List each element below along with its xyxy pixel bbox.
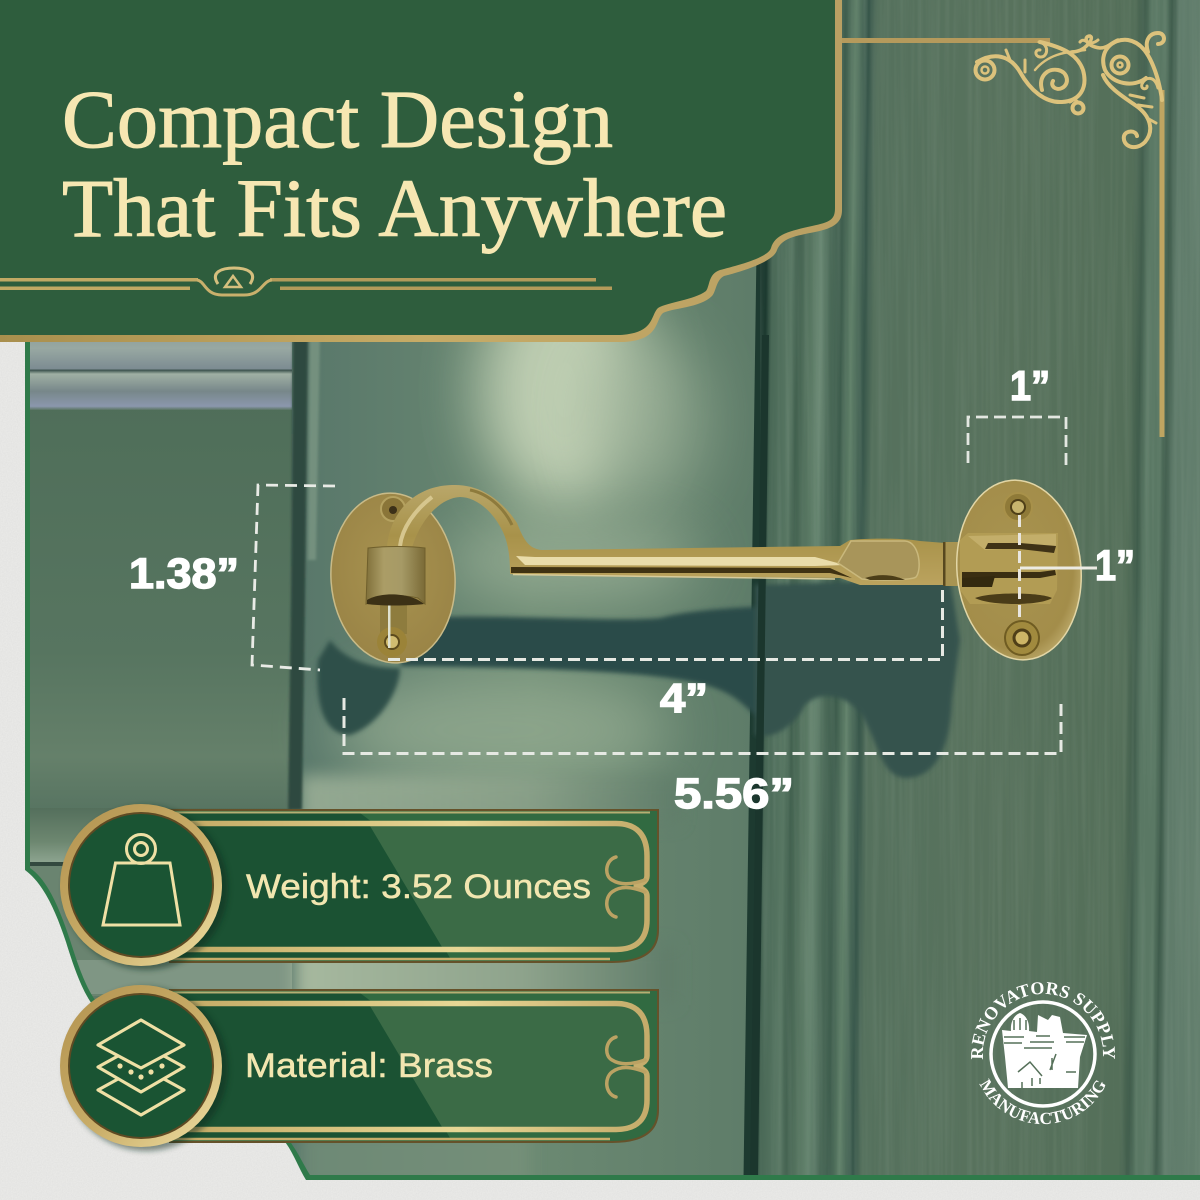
eye top screw — [1004, 493, 1032, 521]
weight badge medallion — [60, 804, 228, 970]
top molding of left panel — [30, 342, 292, 410]
material badge scroll — [607, 1037, 645, 1097]
left mounting plate — [325, 489, 461, 667]
dimension: 1 inch side: 1” — [1095, 542, 1135, 590]
banner gold border — [0, 0, 842, 342]
hook barrel sleeve — [366, 546, 425, 606]
dimension: 4 inch: 4” — [660, 675, 708, 721]
right door with vertical beading — [743, 0, 1200, 1180]
logo house — [1002, 1013, 1087, 1088]
material text: Material: Brass — [245, 1047, 493, 1085]
weight text: Weight: 3.52 Ounces — [246, 868, 591, 906]
icon: material layers — [98, 1020, 184, 1115]
vertical groove in left rail — [288, 335, 320, 810]
shadow cast by hook — [317, 578, 960, 778]
dimension: 1 inch top — [968, 362, 1066, 469]
right scroll — [1103, 33, 1164, 147]
logo: Renovators Supply Manufacturing — [971, 982, 1115, 1124]
material badge gold frame — [170, 1004, 647, 1130]
spec badge: weight — [60, 804, 658, 970]
left scroll — [976, 42, 1085, 114]
eye socket — [960, 533, 1058, 604]
icon: weight — [103, 834, 180, 925]
lower molding of left panel — [30, 820, 294, 1148]
material badge medallion — [60, 985, 228, 1151]
logo arc text: MANUFACTURING — [979, 1078, 1106, 1124]
title text: That Fits Anywhere — [62, 162, 727, 254]
dimension: 1.38 inch: 1.38” — [129, 550, 239, 598]
dimension: 1.38 inch — [129, 485, 335, 670]
title banner — [0, 0, 842, 342]
title text: Compact Design — [62, 73, 613, 165]
weight badge scroll — [607, 857, 645, 917]
dimension: 4 inch — [388, 587, 942, 721]
dimension: 5.56 inch: 5.56” — [674, 770, 794, 818]
dimension: 1 inch top: 1” — [1010, 362, 1050, 409]
top screw — [381, 497, 405, 521]
logo arc text — [971, 982, 1115, 1124]
weight badge gold frame — [170, 824, 647, 950]
title text — [62, 73, 727, 254]
hook arm — [387, 485, 959, 586]
spec badge: material — [60, 985, 658, 1151]
crossed curl — [1072, 36, 1118, 52]
material badge inner shade — [370, 1006, 645, 1127]
dimension: 1 inch side — [1020, 515, 1135, 617]
eye bottom screw — [1005, 621, 1039, 655]
logo arc text: RENOVATORS SUPPLY — [971, 982, 1115, 1060]
banner divider ornament — [0, 268, 612, 295]
wood grain texture — [760, 0, 1200, 1180]
banner green fill — [0, 0, 835, 335]
left door panel — [30, 400, 305, 820]
weight badge panel — [170, 810, 658, 962]
dimension: 5.56 inch — [344, 698, 1061, 818]
right eye plate — [949, 475, 1089, 665]
hook and eye hardware — [325, 475, 1089, 667]
weight badge inner shade — [370, 826, 645, 947]
hook paddle end — [838, 541, 919, 580]
material badge panel — [170, 990, 658, 1142]
center rail — [288, 266, 756, 1175]
bottom stem and screw — [380, 600, 407, 634]
decorative gold corner frame — [842, 33, 1164, 437]
gap between door and frame — [754, 335, 769, 1175]
